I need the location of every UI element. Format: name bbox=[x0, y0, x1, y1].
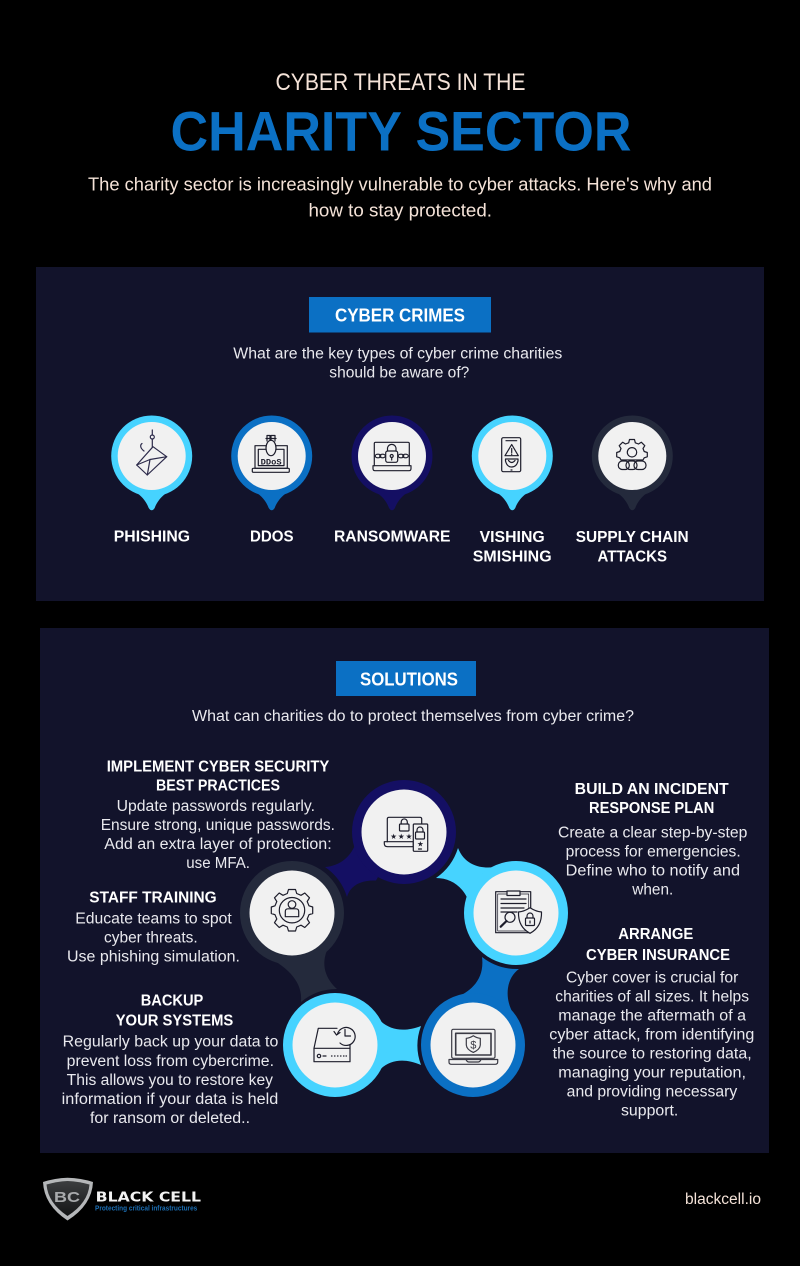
node: staff training bbox=[240, 861, 344, 965]
text: arrange cyber insurance: manage the aftermath of a bbox=[558, 1007, 746, 1024]
label: ddos: DDOS bbox=[250, 528, 294, 545]
pin: ransomware bbox=[352, 416, 432, 510]
text: backup your systems bbox=[62, 993, 278, 1127]
connector: cyan lower bbox=[335, 1017, 421, 1073]
text: arrange cyber insurance: ARRANGE bbox=[618, 926, 693, 943]
node: cyber insurance bbox=[421, 993, 525, 1097]
text: backup your systems: prevent loss from cybercrime. bbox=[67, 1053, 274, 1070]
intro text: how to stay protected. bbox=[308, 201, 492, 221]
icon: gear and chain bbox=[617, 440, 647, 470]
icon: gear with person bbox=[271, 890, 313, 931]
text: backup your systems: for ransom or deleted.. bbox=[90, 1110, 250, 1127]
text: staff training: Use phishing simulation. bbox=[67, 948, 240, 965]
text: build an incident response plan bbox=[558, 781, 747, 898]
text: staff training: cyber threats. bbox=[104, 929, 198, 946]
text: backup your systems: BACKUP bbox=[141, 993, 203, 1010]
icon: laptop and phone passwords bbox=[384, 817, 428, 851]
icon: phishing envelope on hook bbox=[137, 430, 167, 475]
text: implement cyber security best practices bbox=[101, 759, 335, 872]
text: arrange cyber insurance: charities of all sizes. It helps bbox=[555, 988, 749, 1005]
website url: blackcell.io bbox=[685, 1191, 761, 1208]
text: implement cyber security best practices: IMPLEMENT CYBER SECURITY bbox=[107, 759, 330, 776]
logo: black cell bbox=[43, 1178, 201, 1220]
label: supply chain attacks bbox=[576, 529, 689, 565]
text: backup your systems: YOUR SYSTEMS bbox=[116, 1012, 233, 1029]
pin: phishing bbox=[111, 416, 192, 510]
text: build an incident response plan: Create a clear step-by-step bbox=[558, 824, 747, 841]
text: arrange cyber insurance: CYBER INSURANCE bbox=[586, 947, 730, 964]
text: arrange cyber insurance: support. bbox=[621, 1102, 678, 1119]
connector: blue bbox=[455, 957, 519, 1045]
icon: shield: BC bbox=[54, 1189, 80, 1206]
pin: vishing smishing bbox=[472, 416, 553, 510]
text: arrange cyber insurance: managing your reputation, bbox=[558, 1064, 746, 1081]
panel: solutions bbox=[40, 628, 769, 1153]
text: backup your systems: information if your data is held bbox=[62, 1091, 278, 1108]
icon: shield bbox=[43, 1178, 93, 1220]
cyber crimes intro: should be aware of? bbox=[329, 364, 470, 381]
icon: clipboard and shield bbox=[496, 891, 542, 933]
cycle diagram bbox=[240, 780, 568, 1097]
node: incident response bbox=[464, 861, 568, 965]
icon: hard drive with clock bbox=[314, 1027, 355, 1062]
text: staff training: Educate teams to spot bbox=[75, 910, 232, 927]
main title: CHARITY SECTOR bbox=[170, 100, 632, 163]
text: implement cyber security best practices: use MFA. bbox=[186, 855, 250, 872]
text: staff training: STAFF TRAINING bbox=[89, 890, 217, 907]
logo wordmark: BLACK CELL bbox=[96, 1191, 201, 1206]
text: arrange cyber insurance: cyber attack, from identifying bbox=[549, 1026, 754, 1043]
heading badge: cyber crimes: CYBER CRIMES bbox=[335, 305, 465, 326]
icon: laptop and phone passwords: ★ bbox=[417, 840, 424, 848]
title kicker: CYBER THREATS IN THE bbox=[276, 69, 526, 96]
label: supply chain attacks: SUPPLY CHAIN bbox=[576, 529, 689, 546]
label: supply chain attacks: ATTACKS bbox=[598, 548, 667, 565]
text: build an incident response plan: process for emergencies. bbox=[566, 843, 741, 860]
icon: laptop with dollar shield: $ bbox=[470, 1039, 476, 1051]
text: arrange cyber insurance bbox=[549, 926, 754, 1119]
heading badge: cyber crimes bbox=[309, 297, 491, 332]
connector: navy bbox=[325, 832, 404, 897]
intro text bbox=[88, 175, 712, 221]
text: build an incident response plan: when. bbox=[631, 881, 673, 898]
icon: ransomware locked laptop bbox=[373, 442, 411, 471]
label: vishing smishing: VISHING bbox=[480, 529, 545, 546]
label: vishing smishing: SMISHING bbox=[473, 548, 552, 565]
title block bbox=[88, 69, 712, 221]
icon: ddos laptop with bomb: DDoS bbox=[261, 458, 282, 467]
text: implement cyber security best practices: BEST PRACTICES bbox=[156, 778, 280, 795]
node: best practices bbox=[352, 780, 456, 884]
label: vishing smishing bbox=[473, 529, 552, 565]
text: implement cyber security best practices: Ensure strong, unique passwords. bbox=[101, 817, 335, 834]
heading badge: solutions: SOLUTIONS bbox=[360, 669, 458, 690]
text: backup your systems: Regularly back up your data to bbox=[63, 1034, 278, 1051]
connector: cyan upper bbox=[436, 848, 516, 913]
logo tagline: Protecting critical infrastructures bbox=[95, 1206, 197, 1213]
solutions intro: What can charities do to protect themselves from cyber crime? bbox=[192, 708, 634, 725]
label: ransomware: RANSOMWARE bbox=[334, 528, 450, 545]
text: implement cyber security best practices: Add an extra layer of protection: bbox=[104, 836, 332, 853]
heading badge: solutions bbox=[336, 661, 476, 696]
text: arrange cyber insurance: the source to restoring data, bbox=[553, 1045, 752, 1062]
text: arrange cyber insurance: Cyber cover is crucial for bbox=[566, 969, 738, 986]
cyber crimes intro: What are the key types of cyber crime charities bbox=[233, 345, 563, 362]
connector: slate bbox=[268, 913, 337, 1002]
text: implement cyber security best practices: Update passwords regularly. bbox=[117, 798, 315, 815]
node: backup bbox=[283, 993, 387, 1097]
text: build an incident response plan: Define who to notify and bbox=[566, 862, 740, 879]
panel: cyber crimes bbox=[36, 267, 764, 601]
icon: phone with warning bbox=[502, 438, 521, 472]
text: backup your systems: This allows you to restore key bbox=[67, 1072, 273, 1089]
text: arrange cyber insurance: and providing necessary bbox=[567, 1083, 738, 1100]
icon: laptop and phone passwords: ★★★ bbox=[390, 832, 413, 841]
intro text: The charity sector is increasingly vulnerable to cyber attacks. Here's why and bbox=[88, 175, 712, 195]
cyber crimes intro bbox=[233, 345, 563, 381]
text: build an incident response plan: BUILD AN INCIDENT bbox=[575, 781, 729, 798]
label: phishing: PHISHING bbox=[114, 528, 190, 545]
pin: supply chain attacks bbox=[592, 416, 673, 510]
text: build an incident response plan: RESPONSE PLAN bbox=[589, 800, 714, 817]
text: staff training bbox=[67, 890, 240, 965]
pin: ddos bbox=[231, 416, 312, 510]
